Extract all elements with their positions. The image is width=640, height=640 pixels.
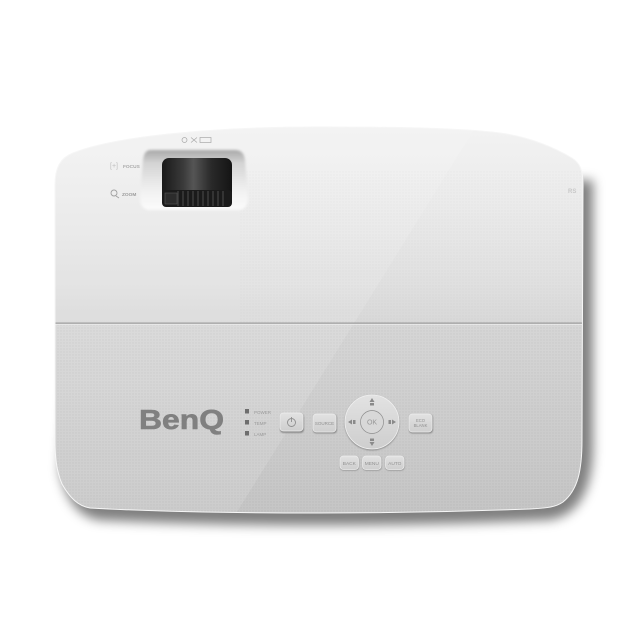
lens barrel xyxy=(162,158,232,207)
menu button xyxy=(362,456,382,470)
source button: SOURCE xyxy=(315,421,334,426)
cover seam xyxy=(40,323,600,324)
infographic: projector top view xyxy=(52,126,601,534)
focus label: [+] xyxy=(110,163,118,170)
BenQ logo: BenQ xyxy=(139,404,224,435)
drop shadow xyxy=(60,180,593,525)
eco blank button: ECO xyxy=(416,418,426,423)
auto button: AUTO xyxy=(388,461,402,467)
indicator: power: POWER xyxy=(254,410,272,415)
diagonal sheen, left lighter xyxy=(40,120,480,520)
menu button: MENU xyxy=(365,461,379,467)
body edge highlight xyxy=(55,127,583,513)
panel: top cover xyxy=(40,120,600,323)
zoom tab xyxy=(165,193,177,204)
power button xyxy=(280,413,304,433)
navigation pad xyxy=(344,395,400,450)
OK button: OK xyxy=(367,420,377,426)
indicator: lamp: LAMP xyxy=(254,432,266,437)
arrows xyxy=(348,398,396,446)
focus ring xyxy=(162,190,232,207)
auto button xyxy=(386,456,404,470)
zoom label: ZOOM xyxy=(122,192,136,198)
source button xyxy=(313,414,337,434)
status indicators xyxy=(245,409,272,437)
eco blank button: BLANK xyxy=(414,423,428,428)
projector body xyxy=(56,128,582,512)
zoom label xyxy=(111,190,136,198)
panel: control cover xyxy=(56,324,582,512)
certification mark: RS xyxy=(568,189,576,195)
lens recess xyxy=(140,150,248,210)
back button: BACK xyxy=(343,461,357,467)
indicator: temp: TEMP xyxy=(254,421,267,426)
back button xyxy=(340,456,359,470)
focus label xyxy=(110,163,141,170)
lens cover switch icon xyxy=(182,138,211,142)
focus label: FOCUS xyxy=(123,164,141,170)
eco blank button xyxy=(409,414,433,434)
